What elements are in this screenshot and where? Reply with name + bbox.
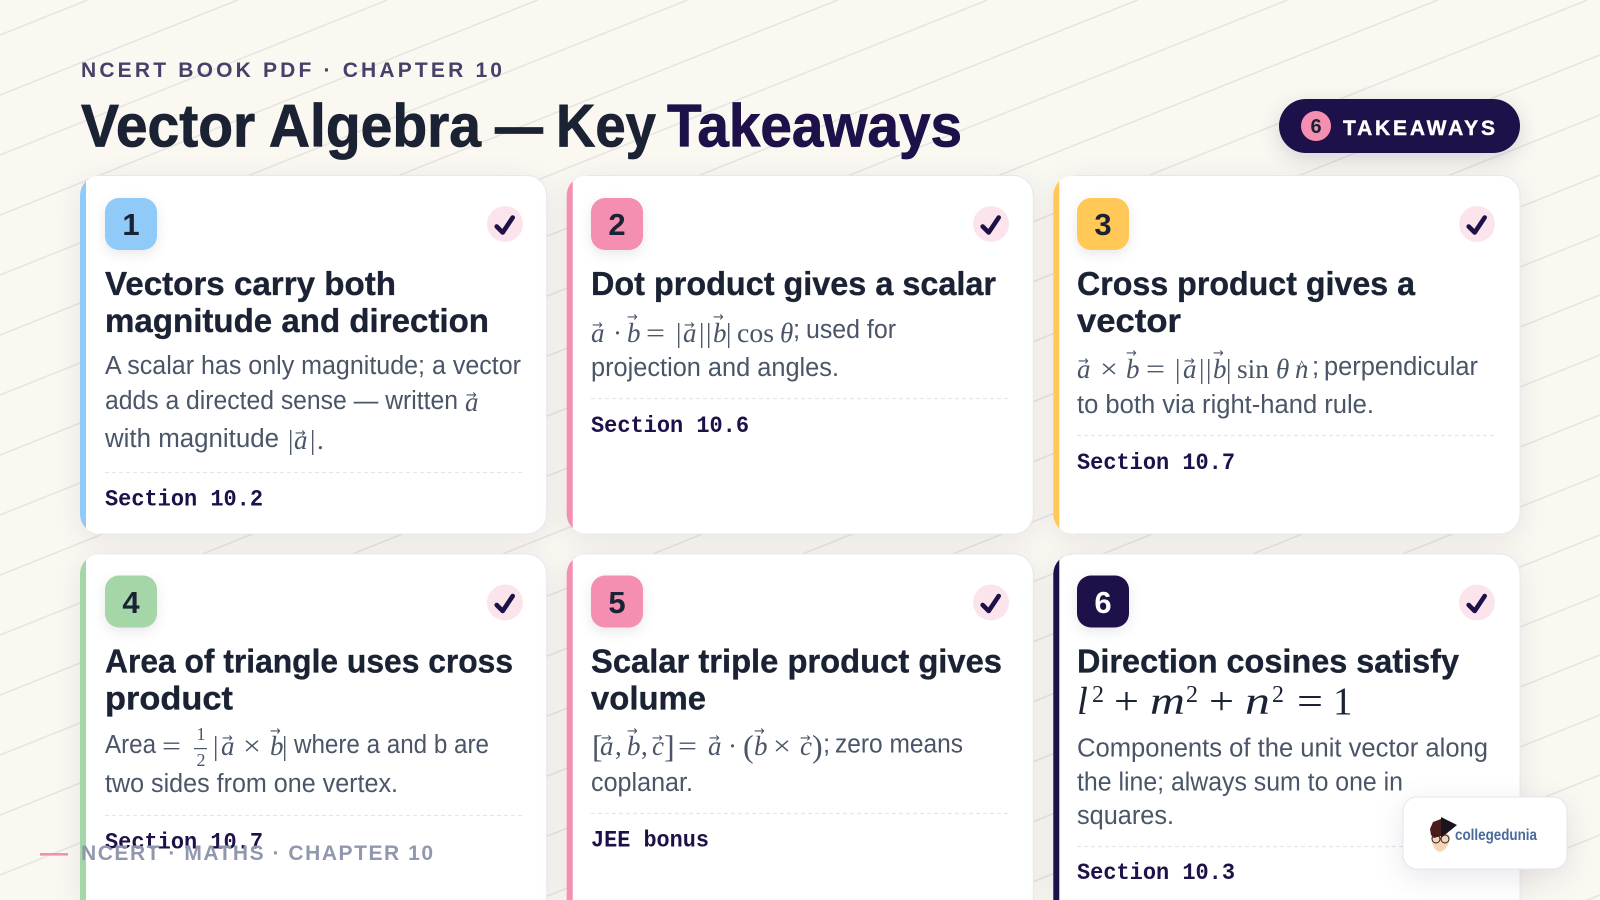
- panel: card 4 area of triangle: [80, 554, 547, 900]
- card 6 heading with formula: +: [1114, 680, 1139, 723]
- card 2 body with dot product formula: b: [713, 318, 726, 348]
- card 2 body with dot product formula: [591, 310, 896, 382]
- card 6 heading with formula: 2: [1272, 682, 1284, 708]
- card 1 heading: [105, 266, 489, 340]
- card 6 body: Components of the unit vector along: [1077, 734, 1488, 762]
- card 6 heading with formula: 1: [1333, 680, 1352, 723]
- card 1 body: a: [294, 425, 308, 455]
- logo card: collegedunia: [1403, 797, 1567, 869]
- card 2 body with dot product formula: θ: [780, 318, 793, 348]
- card 4 check icon: [487, 584, 523, 620]
- card 5 body with triple product formula: ,: [615, 731, 622, 761]
- logo card: collegedunia: :: [1534, 833, 1536, 842]
- card 3 body with cross product formula: [1077, 346, 1478, 419]
- card 5 check icon: [973, 584, 1009, 620]
- card 6 heading with formula: 2: [1092, 682, 1104, 708]
- title: [81, 92, 962, 160]
- title: Vector Algebra: [81, 92, 482, 160]
- card 3 body with cross product formula: →: [1078, 354, 1089, 369]
- card 5 body with triple product formula: zero means: [835, 730, 963, 758]
- card 2 number badge: 2: [608, 207, 626, 242]
- card 1 section tag: Section 10.2: [105, 486, 263, 512]
- card 5 body with triple product formula: →: [627, 724, 638, 739]
- card 2 body with dot product formula: →: [684, 318, 695, 333]
- card 3 heading: Cross product gives a: [1077, 266, 1415, 303]
- panel: card 2 dot product: [567, 176, 1033, 534]
- card 1 check icon: [487, 206, 523, 242]
- card 6 heading with formula: m: [1150, 680, 1185, 723]
- card 5 body with triple product formula: ,: [641, 731, 648, 761]
- card 6 heading with formula: [1077, 644, 1459, 723]
- card 3 body with cross product formula: to both via right-hand rule.: [1077, 391, 1374, 419]
- card 1 body: |: [288, 425, 293, 455]
- card 5 body with triple product formula: (: [743, 728, 754, 764]
- card 1 body: [104, 352, 521, 455]
- card 6 heading with formula: Direction cosines satisfy: [1077, 644, 1459, 680]
- card 5 body with triple product formula: ·: [728, 731, 737, 761]
- card 2 body with dot product formula: a: [683, 318, 696, 348]
- card 1 body: →: [295, 426, 306, 441]
- eyebrow: NCERT Book PDF: NCERT BOOK PDF · CHAPTER 10: [81, 59, 502, 82]
- card 2 body with dot product formula: ·: [613, 318, 622, 348]
- icon: student face with cap: [1430, 817, 1457, 852]
- card 6 number badge: 6: [1094, 585, 1112, 620]
- card 4 body with area formula: where a and b are: [293, 731, 489, 759]
- card 2 body with dot product formula: b: [627, 318, 640, 348]
- card 2 body with dot product formula: |: [706, 318, 711, 348]
- footer label: NCERT · MATHS · CHAPTER 10: [81, 842, 433, 865]
- card 1 body: A scalar has only magnitude; a vector: [105, 352, 521, 380]
- card 4 heading: Area of triangle uses cross: [105, 644, 513, 680]
- card 2 heading: Dot product gives a scalar: [591, 266, 996, 303]
- card 3 body with cross product formula: b: [1126, 354, 1140, 384]
- card 2 body with dot product formula: →: [592, 318, 603, 333]
- card 4 body with area formula: |: [213, 731, 218, 761]
- card 3 body with cross product formula: =: [1146, 354, 1165, 384]
- card 6 section tag: Section 10.3: [1077, 860, 1235, 886]
- panel: card 6 direction cosines: [1053, 554, 1520, 900]
- card 5 body with triple product formula: b: [754, 731, 768, 761]
- card 1 body: →: [466, 388, 477, 403]
- card 5 heading: Scalar triple product gives: [591, 644, 1002, 680]
- card 2 body with dot product formula: cos: [737, 318, 774, 348]
- card 6 body: [1077, 734, 1488, 830]
- panel: card 3 cross product: [1053, 176, 1520, 534]
- card 5 body with triple product formula: a: [600, 731, 614, 761]
- card 5 body with triple product formula: [591, 724, 963, 797]
- card 3 heading: vector: [1077, 303, 1181, 340]
- card 4 body with area formula: ×: [243, 731, 261, 761]
- card 3 body with cross product formula: n: [1295, 354, 1308, 384]
- card 5 body with triple product formula: ): [812, 728, 823, 764]
- card 3 body with cross product formula: a: [1077, 354, 1090, 384]
- card 5 number badge: 5: [608, 585, 626, 620]
- card 6 body: squares.: [1077, 802, 1174, 830]
- card 1 body: with magnitude: [104, 425, 279, 453]
- title: Key: [556, 92, 657, 160]
- card 3 body with cross product formula: |: [1175, 354, 1180, 384]
- card 2 number badge: [591, 198, 643, 250]
- card 4 body with area formula: |: [282, 731, 287, 761]
- card 3 body with cross product formula: →: [1126, 346, 1137, 361]
- card 5 body with triple product formula: ]: [664, 728, 675, 764]
- card 3 check icon: [1459, 206, 1495, 242]
- card 3 body with cross product formula: a: [1183, 354, 1196, 384]
- card 5 heading: [591, 644, 1002, 718]
- card 5 body with triple product formula: a: [708, 731, 722, 761]
- card 3 heading: [1077, 266, 1415, 340]
- card 5 body with triple product formula: →: [754, 724, 765, 739]
- card 3 body with cross product formula: θ: [1276, 354, 1289, 384]
- card 2 body with dot product formula: =: [646, 318, 665, 348]
- title: —: [495, 92, 543, 160]
- card 6 heading with formula: +: [1209, 680, 1234, 723]
- card 3 body with cross product formula: ×: [1100, 354, 1118, 384]
- card 5 body with triple product formula: →: [800, 731, 811, 746]
- card 4 body with area formula: =: [162, 731, 181, 761]
- card 5 body with triple product formula: c: [800, 731, 812, 761]
- card 4 body with area formula: →: [222, 731, 233, 746]
- card 2 body with dot product formula: used for: [806, 316, 896, 344]
- card 5 body with triple product formula: c: [652, 731, 664, 761]
- card 6 heading with formula: =: [1297, 680, 1323, 723]
- title: Takeaways: [667, 92, 962, 160]
- card 4 number badge: 4: [122, 585, 140, 620]
- card 3 body with cross product formula: ^: [1298, 358, 1306, 375]
- card 2 body with dot product formula: projection and angles.: [591, 354, 839, 382]
- badge: 6 takeaways pill: TAKEAWAYS: [1343, 117, 1495, 140]
- card 1 heading: magnitude and direction: [105, 303, 489, 340]
- card 1 body: |: [310, 425, 315, 455]
- card 4 number badge: [105, 576, 157, 628]
- card 3 body with cross product formula: b: [1213, 354, 1226, 384]
- card 2 check icon: [973, 206, 1009, 242]
- card 5 body with triple product formula: ;: [823, 730, 830, 758]
- card 2 body with dot product formula: |: [726, 318, 731, 348]
- card 4 heading: [105, 644, 513, 718]
- card 2 body with dot product formula: a: [591, 318, 604, 348]
- logo card: collegedunia: collegedunia: [1455, 827, 1537, 844]
- card 5 section tag: JEE bonus: [591, 828, 709, 854]
- card 5 number badge: [591, 576, 643, 628]
- badge: 6 takeaways pill: 6: [1310, 116, 1322, 138]
- card 3 number badge: 3: [1094, 207, 1112, 242]
- card 2 section tag: Section 10.6: [591, 413, 749, 439]
- card 3 body with cross product formula: |: [1199, 354, 1204, 384]
- card 1 heading: Vectors carry both: [105, 266, 396, 303]
- card 5 body with triple product formula: [: [592, 728, 603, 764]
- card 6 check icon: [1459, 584, 1495, 620]
- card 5 body with triple product formula: b: [627, 731, 640, 761]
- card 3 body with cross product formula: →: [1213, 346, 1224, 361]
- card 3 body with cross product formula: sin: [1237, 354, 1270, 384]
- card 4 body with area formula: →: [270, 724, 281, 739]
- card 2 body with dot product formula: →: [627, 310, 638, 325]
- card 4 body with area formula: b: [270, 731, 284, 761]
- card 1 body: adds a directed sense — written: [105, 387, 458, 415]
- card 3 body with cross product formula: ;: [1312, 353, 1319, 381]
- card 3 body with cross product formula: |: [1206, 354, 1211, 384]
- card 4 heading: product: [105, 680, 233, 718]
- card 1 number badge: 1: [122, 207, 140, 242]
- card 5 body with triple product formula: →: [652, 731, 663, 746]
- card 1 body: a: [465, 387, 478, 417]
- card 6 heading with formula: 2: [1186, 682, 1198, 708]
- card 5 body with triple product formula: →: [601, 731, 612, 746]
- card 2 body with dot product formula: |: [676, 318, 681, 348]
- card 5 body with triple product formula: =: [678, 731, 697, 761]
- card 3 body with cross product formula: →: [1184, 354, 1195, 369]
- card 3 body with cross product formula: |: [1226, 354, 1231, 384]
- card 6 heading with formula: l: [1077, 680, 1088, 723]
- card 4 section tag: Section 10.7: [105, 830, 263, 856]
- card 6 heading with formula: n: [1245, 680, 1270, 723]
- card 5 heading: volume: [591, 680, 706, 718]
- card 2 body with dot product formula: →: [713, 310, 724, 325]
- card 4 body with area formula: a: [221, 731, 234, 761]
- card 4 body with area formula: Area: [105, 731, 157, 759]
- card 4 body with area formula: 2: [196, 750, 206, 770]
- card 4 body with area formula: two sides from one vertex.: [105, 770, 398, 798]
- card 2 body with dot product formula: ;: [793, 316, 800, 344]
- panel: card 1 vectors: [80, 176, 547, 534]
- card 6 number badge: [1077, 576, 1129, 628]
- card 3 body with cross product formula: perpendicular: [1324, 353, 1478, 381]
- badge: 6 takeaways pill: [1279, 99, 1520, 153]
- card 6 body: the line; always sum to one in: [1077, 768, 1403, 796]
- card 5 body with triple product formula: →: [709, 731, 720, 746]
- card 3 number badge: [1077, 198, 1129, 250]
- panel: card 5 scalar triple product: [567, 554, 1033, 900]
- card 1 number badge: [105, 198, 157, 250]
- card 4 body with area formula: 1: [196, 724, 206, 744]
- card 5 body with triple product formula: ×: [773, 731, 791, 761]
- card 3 section tag: Section 10.7: [1077, 450, 1235, 476]
- card 4 body with area formula: [105, 724, 489, 798]
- card 2 body with dot product formula: |: [699, 318, 704, 348]
- card 1 body: .: [317, 425, 324, 455]
- card 5 body with triple product formula: coplanar.: [591, 769, 693, 797]
